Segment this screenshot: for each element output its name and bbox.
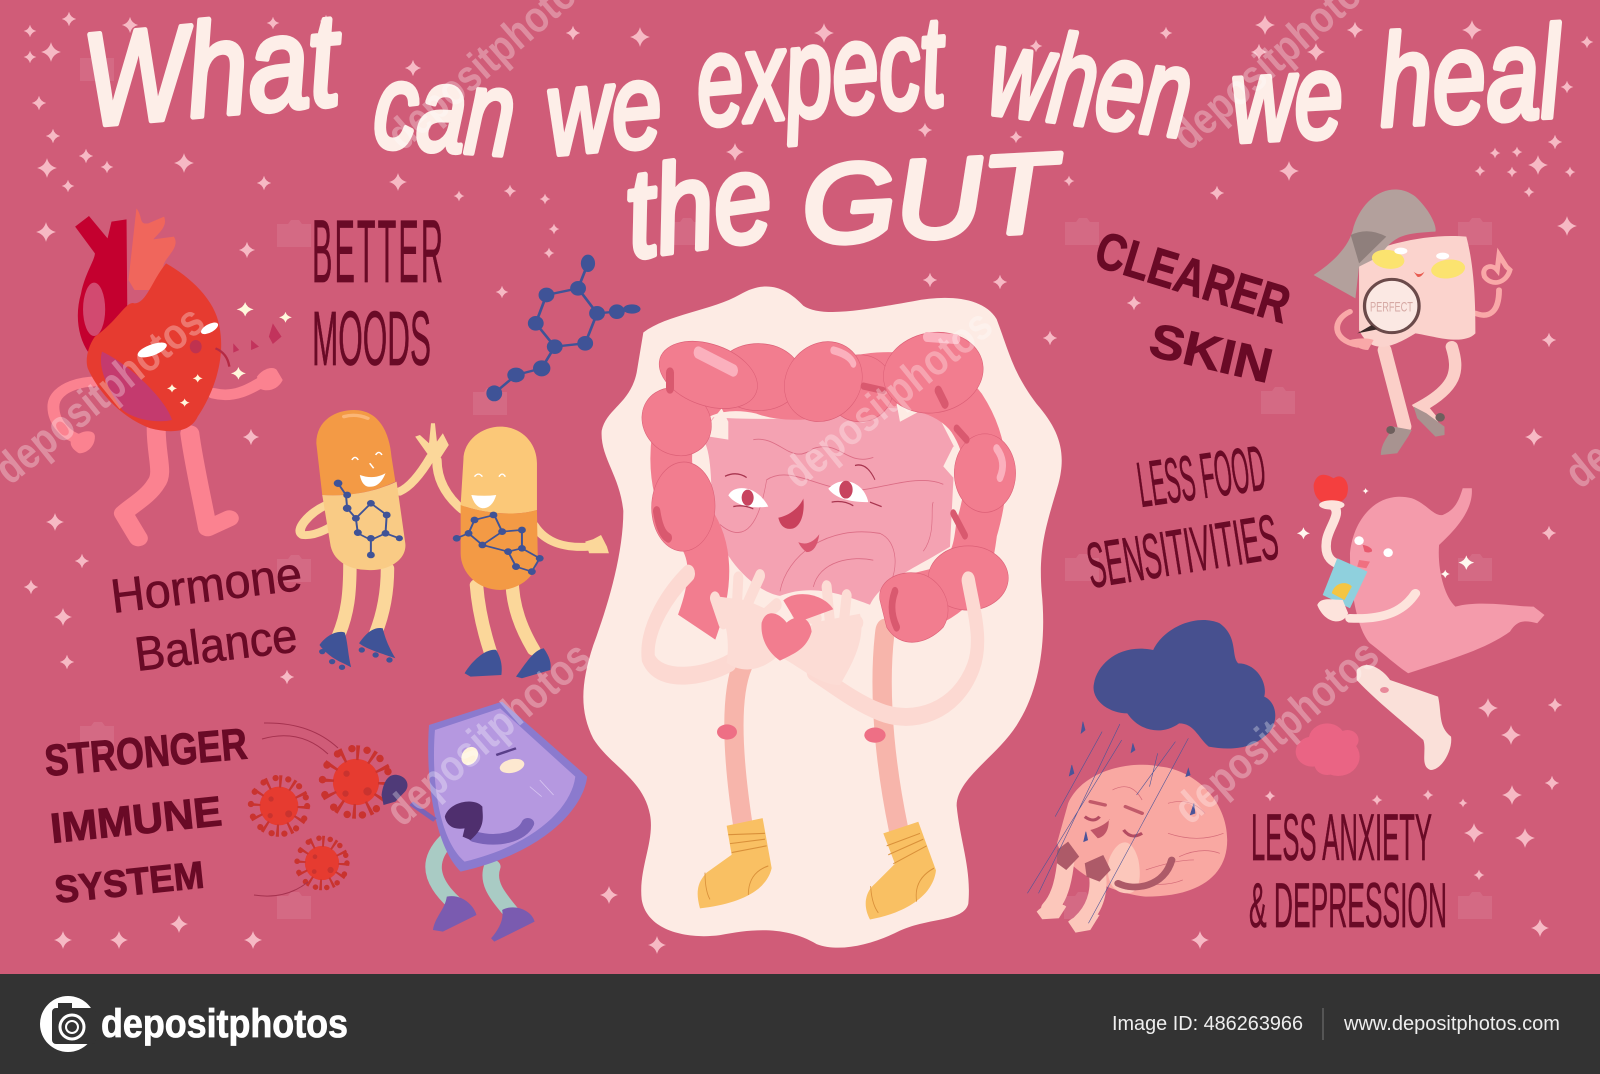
brain xyxy=(1057,765,1227,897)
rain cloud xyxy=(1094,620,1275,749)
character: orange pill xyxy=(300,410,449,670)
diagonal watermark: depositphotos xyxy=(1164,630,1388,834)
title: the xyxy=(616,127,780,285)
label: better moods xyxy=(312,201,445,382)
title: when xyxy=(982,2,1199,164)
socks xyxy=(698,818,936,920)
small intestine xyxy=(700,399,955,605)
label: stronger immune system: STRONGER xyxy=(43,719,249,786)
label: clearer skin: CLEARER xyxy=(1088,221,1297,335)
viruses xyxy=(251,723,390,896)
label: hormone balance: Balance xyxy=(132,609,300,682)
stomach legs and puff xyxy=(1296,665,1451,776)
text: MOODS xyxy=(312,296,431,382)
character: yellow pill xyxy=(437,427,609,678)
character: shield with boxing gloves xyxy=(382,702,587,942)
label: hormone balance: Hormone xyxy=(108,548,305,624)
character: skin with towel and magnifier xyxy=(1314,189,1510,455)
label: stronger immune system: IMMUNE xyxy=(48,787,224,852)
camera watermarks xyxy=(80,54,1492,919)
label: clearer skin: SKIN xyxy=(1145,314,1277,394)
character: sad brain with rain cloud xyxy=(1027,620,1275,933)
large intestine xyxy=(638,327,1016,642)
label: stronger immune system: SYSTEM xyxy=(53,855,206,912)
arms xyxy=(648,574,978,717)
diagonal watermark: depositphotos xyxy=(773,300,1002,498)
central panel: gut character xyxy=(583,286,1062,948)
footer logo camera icon xyxy=(40,996,96,1052)
diagonal watermark xyxy=(0,0,1600,836)
label: stronger immune system xyxy=(43,719,249,912)
title: can xyxy=(370,38,519,182)
character: heart xyxy=(53,208,292,538)
label: less anxiety and depression xyxy=(1249,800,1447,941)
label: less food sensitivities xyxy=(1082,432,1283,602)
text: LESS FOOD xyxy=(1133,432,1270,521)
website url: www.depositphotos.com xyxy=(1343,1013,1560,1035)
molecule xyxy=(486,255,641,401)
title xyxy=(78,0,1567,285)
rain xyxy=(1027,722,1195,923)
label: hormone balance xyxy=(108,548,305,682)
face xyxy=(725,465,882,552)
legs xyxy=(734,632,898,828)
label: clearer skin xyxy=(1088,221,1297,394)
cream background blob xyxy=(583,286,1062,948)
diagonal watermark: depositphotos xyxy=(376,632,600,836)
character: skin with towel and magnifier: PERFECT xyxy=(1370,300,1413,315)
text: SENSITIVITIES xyxy=(1082,501,1283,602)
title: GUT xyxy=(799,129,1067,268)
image id: Image ID: 486263966 xyxy=(1112,1013,1303,1035)
title: we xyxy=(1227,28,1346,168)
character: stomach with apple and lemon water xyxy=(1297,475,1544,673)
title: we xyxy=(541,37,667,181)
footer logo wordmark: depositphotos xyxy=(101,1002,348,1046)
footer bar xyxy=(0,974,1600,1074)
text: BETTER xyxy=(312,201,445,301)
hands forming a heart xyxy=(713,576,862,685)
